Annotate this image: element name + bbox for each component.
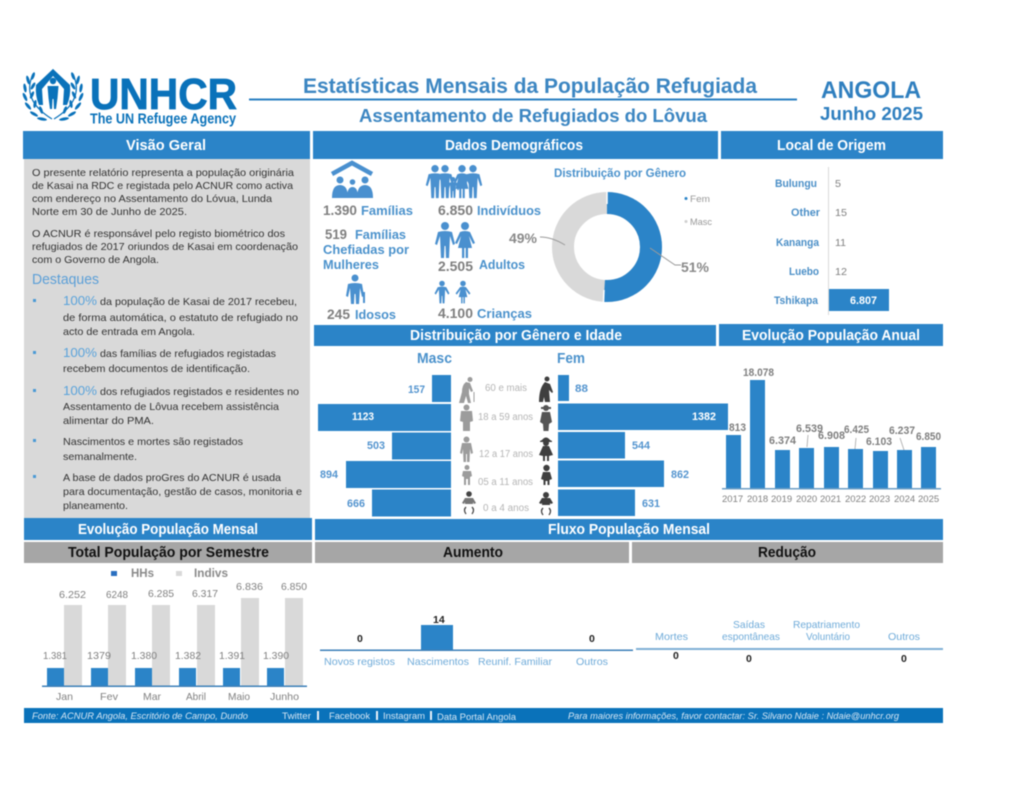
stat: famílias [323,203,413,218]
bar chart: aumento: 0 [589,633,595,645]
footer links: Data Portal Angola [437,712,516,722]
logo tagline: The UN Refugee Agency [90,110,237,128]
logo wordmark: UNHCR [90,70,237,119]
bar chart: origin: 12 [835,266,847,278]
text block: introduction [32,167,298,266]
panel: evolução população mensal [24,518,312,703]
heading bar: Distribuição por Gênero e Idade [314,325,716,346]
bar chart: annual population: 2022 [845,494,866,505]
population pyramid: male bars [318,375,451,516]
population pyramid: male bars: 503 [367,440,385,452]
stat: indivíduos [438,203,541,218]
bar chart: annual population: 2018 [747,494,768,505]
bar chart: annual population: 813 [729,422,746,434]
bar chart: monthly population: 1.390 [263,650,289,662]
population pyramid: female bars [558,375,728,516]
bar chart: redução: Outros [888,631,920,643]
bar chart: origin: 6.807 [850,295,877,307]
bullet 2: recebem documentos de identificação. [63,363,250,375]
bar chart: origin: 15 [835,207,847,219]
age group labels: 12 a 17 anos [479,449,533,460]
icons: male age figures [459,377,476,514]
bullet 1: da população de Kasai de 2017 recebeu, [100,296,297,308]
title: Estatísticas Mensais da População Refugiada [303,74,758,98]
bullet 1: acto de entrada em Angola. [63,326,195,338]
panel: visão geral [23,131,310,518]
donut chart: distribuição por género [509,166,712,303]
panel: distribuição por género e idade [314,325,728,516]
stat: indivíduos: 6.850 [438,203,473,218]
chart title: Distribuição por Gênero [554,166,686,180]
age group labels: 0 a 4 anos [483,503,529,514]
bar chart: origin: Luebo [789,266,819,278]
stat: famílias chefiadas por mulheres: Mulheres [323,257,379,272]
bullet 5: A base de dados proGres do ACNUR é usada [63,472,281,484]
bar chart: annual population: 6.908 [818,430,845,442]
text block: introduction: Norte em 30 de Junho de 2025. [32,206,187,218]
sub-heading bar: Aumento [315,542,629,563]
bullet 4: Nascimentos e mortes são registados [63,436,243,448]
legend: HHs [131,568,154,580]
highlight list [33,293,302,512]
legend: Indivs [194,568,228,580]
bar chart: monthly population: Jan [56,691,73,703]
heading: Destaques: Destaques [32,272,99,288]
stat: indivíduos: Indivíduos [477,203,541,218]
bar chart: monthly population: 1379 [87,650,111,662]
bar chart: monthly population: Abril [186,691,206,703]
legend [684,194,712,228]
bullet 5 [33,472,302,512]
bar chart: redução: Mortes [655,631,688,643]
bar chart: annual population [722,367,941,505]
footer contact: Para maiores informações, favor contactar: Sr. Silvano Ndaie : Ndaie@unhcr.org [568,711,899,721]
bullet 4: semanalmente. [63,451,137,463]
heading bar: Evolução População Anual [719,324,943,346]
icon: elderly person [346,274,365,304]
text block: introduction: refugiados de 2017 oriundos de Kasai em coordenação [32,241,298,253]
bar chart: monthly population: Mar [143,691,161,703]
stat: adultos: Adultos [479,257,525,272]
population pyramid: female bars: 862 [671,469,689,481]
population pyramid: female bars: 631 [642,498,660,510]
UNHCR logo [22,69,237,128]
sub-heading bar: Total População por Semestre [24,542,312,563]
bar chart: aumento: Outros [576,656,608,668]
bar chart: monthly population: 6248 [106,589,128,601]
footer [24,708,943,723]
population pyramid: male bars: 157 [408,384,425,396]
stat: crianças [438,306,532,321]
stat: famílias chefiadas por mulheres [323,227,409,272]
age group labels: 05 a 11 anos [478,477,533,488]
bar chart: monthly population: 1.380 [131,650,157,662]
bar chart: monthly population: Fev [100,691,119,703]
icons: female age figures [539,376,553,515]
bar chart: annual population: 6.425 [844,424,869,436]
bar chart: origin: Other [791,207,821,219]
text block: introduction: O ACNUR é responsável pelo registo biométrico dos [32,228,285,240]
age group labels: 60 e mais [485,383,527,394]
bar chart: monthly population: 6.285 [148,588,174,600]
bar chart: redução: 0 [901,653,907,665]
bar chart: monthly population: 6.850 [281,581,307,593]
population pyramid: female bars: 1382 [692,411,716,423]
bar chart: annual population: 6.103 [866,436,892,448]
bar chart: origin: Tshikapa [774,295,819,307]
stat: adultos: 2.505 [438,259,473,274]
bullet 3: alimentar do PMA. [63,415,154,427]
age group labels [478,383,533,514]
sub-heading bar: Redução [632,542,943,563]
bar chart: monthly population: 6.317 [192,588,218,600]
bar chart: monthly population: 1.381 [43,650,67,662]
bar chart: monthly population: 1.391 [219,650,245,662]
sub-heading bar: Total População por Semestre: Total População por Semestre [68,545,269,561]
bar chart: annual population: 2025 [918,494,939,505]
label Masc: Masc [417,351,452,367]
bullet 4 [33,436,243,463]
footer source: Fonte: ACNUR Angola, Escritório de Campo, Dundo [32,711,248,721]
bullet 3: dos refugiados registados e residentes no [100,386,299,398]
bullet 3 [33,383,299,427]
population pyramid: female bars: 88 [575,383,588,395]
bar chart: redução: 0 [673,650,679,662]
bar chart: aumento: Reunif. Familiar [478,656,552,668]
bullet 3: Assentamento de Lôvua recebem assistência [63,401,279,413]
heading bar: Local de Origem: Local de Origem [777,138,886,154]
bar chart: annual population: 6.539 [796,423,823,435]
text block: introduction: com o Governo de Angola. [32,254,159,266]
heading bar: Evolução População Mensal: Evolução População Mensal [78,522,258,538]
footer links: Instagram [383,711,425,721]
population pyramid: female bars: 544 [632,440,651,452]
bar chart: redução [636,619,943,665]
bullet 5: planeamento. [63,500,128,512]
stat: famílias: Famílias [361,203,413,218]
bullet 1: de forma automática, o estatuto de refugiado no [63,312,298,324]
bar chart: redução: 0 [746,653,752,665]
bar chart: aumento: Nascimentos [407,656,469,668]
heading bar: Evolução População Mensal [24,518,312,540]
country heading: ANGOLA [821,77,921,104]
population pyramid: male bars: 1123 [352,411,374,423]
bullet 2 [33,345,276,375]
bar chart: annual population: 2023 [869,494,890,505]
stat: crianças: Crianças [477,306,532,321]
bar chart: monthly population [42,581,307,703]
bar chart: annual population: 2019 [771,494,792,505]
bar chart: monthly population: 6.252 [59,589,86,601]
icon: children [435,281,470,303]
bar chart: annual population: 6.237 [889,425,915,437]
bar chart: origin [774,167,889,315]
bullet 3: 100% [63,383,97,398]
bar chart: redução: Repatriamento [793,619,860,631]
text block: introduction: com endereço no Assentamento do Lóvua, Lunda [32,193,272,205]
bar chart: aumento [320,614,633,668]
bar chart: redução: espontâneas [722,631,780,643]
bar chart: annual population: 2020 [796,494,817,505]
icon: UNHCR emblem [22,69,84,121]
legend [111,568,228,580]
bar chart: origin: Bulungu [775,178,817,190]
stat: adultos [438,257,525,274]
panel: dados demográficos [313,131,718,322]
icon: group of people [426,165,482,198]
bar chart: aumento: Novos registos [324,656,395,668]
population pyramid: male bars: 894 [320,469,339,481]
date heading: Junho 2025 [820,103,923,124]
bar chart: origin: 11 [835,237,846,249]
bar chart: annual population: 6.374 [769,435,797,447]
heading bar: Fluxo População Mensal [315,519,943,540]
subtitle: Assentamento de Refugiados do Lôvua [359,105,708,126]
age group labels: 18 a 59 anos [478,412,533,423]
stat: famílias: 1.390 [323,203,357,218]
text block: introduction: de Kasai na RDC e registada pelo ACNUR como activa [32,180,293,192]
bullet 5: para documentação, gestão de casos, monitoria e [63,486,302,498]
heading bar: Dados Demográficos: Dados Demográficos [445,138,583,154]
heading bar: Evolução População Anual: Evolução População Anual [742,328,920,344]
label 51%: 51% [681,259,710,275]
panel: local de origem [721,131,943,315]
stat: famílias chefiadas por mulheres: Chefiadas por [323,242,409,257]
population pyramid: male bars: 666 [347,498,365,510]
icon: family under roof [332,163,373,198]
bar chart: annual population: 2024 [894,494,915,505]
sub-heading bar: Aumento: Aumento [443,545,503,561]
text block: introduction: O presente relatório representa a população originária [32,167,294,179]
stat: famílias chefiadas por mulheres: 519 [325,227,347,242]
bar chart: annual population: 2021 [820,494,841,505]
bar chart: annual population: 2017 [722,494,743,505]
heading bar: Visão Geral [23,131,310,159]
sub-heading bar: Redução: Redução [758,545,816,561]
bar chart: aumento: 0 [357,633,363,645]
icon: adults [435,222,475,258]
bullet 2: 100% [63,345,97,360]
legend: Masc [690,217,712,228]
legend: Fem [690,194,710,205]
stat: idosos: 245 [327,307,350,322]
panel: fluxo população mensal [315,519,943,668]
footer links: Facebook [329,711,371,721]
heading bar: Visão Geral: Visão Geral [126,138,206,154]
label Fem: Fem [557,351,585,367]
heading bar: Dados Demográficos [313,131,718,159]
heading bar: Fluxo População Mensal: Fluxo População Mensal [548,522,710,538]
bar chart: annual population: 18.078 [743,367,774,379]
bar chart: annual population: 6.850 [916,431,941,443]
bar chart: origin: 5 [835,178,841,190]
label 49%: 49% [509,230,538,246]
bar chart: origin: Kananga [776,237,820,249]
bar chart: redução: Saídas [733,619,765,631]
bullet 1: 100% [63,293,97,308]
heading bar: Distribuição por Gênero e Idade: Distribuição por Gênero e Idade [410,328,622,344]
bullet 1 [33,293,298,338]
bullet 2: das famílias de refugiados registadas [100,348,276,360]
bar chart: redução: Voluntário [806,631,850,643]
stat: idosos [327,307,396,322]
stat: idosos: Idosos [355,307,396,322]
bar chart: aumento: 14 [433,614,445,626]
panel: evolução população anual [719,324,943,505]
stat: crianças: 4.100 [438,306,473,321]
bar chart: monthly population: Maio [228,691,250,703]
bar chart: monthly population: 6.836 [236,581,263,593]
footer links: Twitter [282,711,311,721]
bar chart: monthly population: Junho [270,691,299,703]
footer links [282,711,516,722]
bar chart: monthly population: 1.382 [175,650,201,662]
heading bar: Local de Origem [721,131,943,159]
stat: famílias chefiadas por mulheres: Famílias [355,227,406,242]
